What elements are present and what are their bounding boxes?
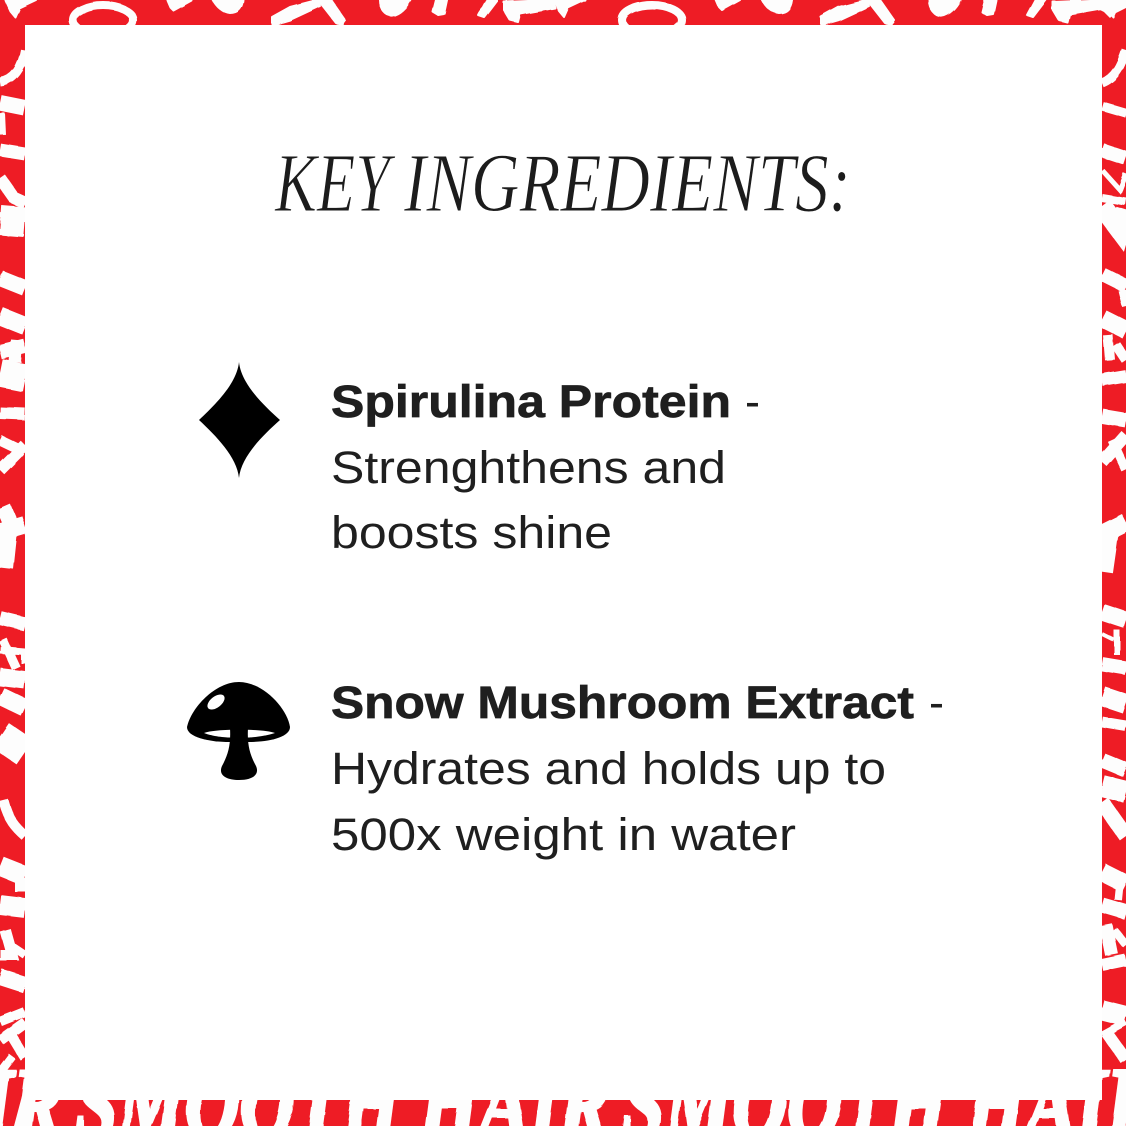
top right corner strokes bbox=[1096, 0, 1126, 18]
ingredient: spirulina protein: Spirulina Protein bbox=[331, 376, 731, 427]
icon: four-point star bbox=[199, 362, 280, 478]
title bbox=[274, 137, 851, 230]
ingredient: spirulina protein: boosts shine bbox=[331, 507, 612, 558]
icon: mushroom bbox=[187, 682, 290, 780]
bottom left corner strokes bbox=[14, 1096, 34, 1126]
bottom border lettering bbox=[0, 1048, 1126, 1126]
ingredient: spirulina protein: - bbox=[745, 376, 760, 427]
ingredient: snow mushroom extract bbox=[331, 677, 944, 860]
ingredient: spirulina protein bbox=[331, 376, 760, 558]
ingredient: spirulina protein: Strenghthens and bbox=[331, 442, 726, 493]
title: INGREDIENTS: bbox=[403, 137, 851, 230]
ingredient: snow mushroom extract: Snow Mushroom Extract bbox=[331, 677, 914, 728]
ingredient: snow mushroom extract: Hydrates and holds up to bbox=[331, 743, 886, 794]
ingredient: snow mushroom extract: 500x weight in water bbox=[331, 809, 796, 860]
top border brush strokes bbox=[5, 0, 1126, 35]
right border brush strokes bbox=[1102, 50, 1126, 1060]
ingredient: snow mushroom extract: - bbox=[929, 677, 944, 728]
left border brush strokes bbox=[0, 50, 25, 1072]
title: KEY bbox=[274, 137, 396, 230]
